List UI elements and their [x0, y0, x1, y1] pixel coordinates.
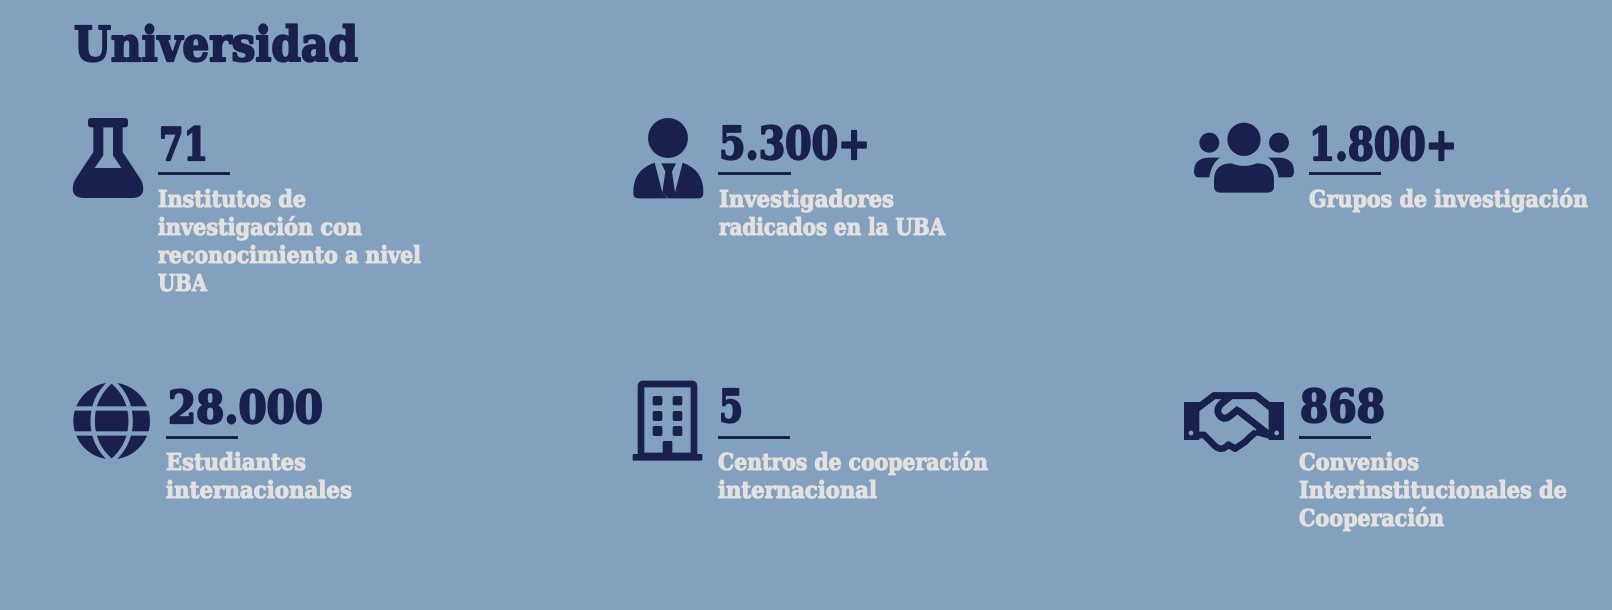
description: convenios: [1299, 449, 1567, 532]
description: convenios: Interinstitucionales de: [1299, 477, 1567, 504]
description: grupos: Grupos de investigación: [1309, 186, 1588, 213]
panel: convenios: [1184, 380, 1567, 532]
description: institutos: [158, 186, 421, 297]
panel: grupos: [1194, 118, 1588, 213]
icon: building: [633, 384, 702, 461]
panel: estudiantes: [70, 381, 352, 504]
description: convenios: Cooperación: [1299, 505, 1444, 532]
description: centros: [718, 449, 988, 504]
panel: investigadores: [633, 117, 946, 241]
number: 28.000: 28.000: [168, 381, 323, 434]
panel: institutos: [73, 118, 421, 297]
icon: person with tie: [633, 118, 703, 198]
description: investigadores: [719, 186, 946, 241]
number: 5: 5: [719, 380, 743, 433]
underline: [1299, 436, 1371, 439]
description: estudiantes: [166, 449, 352, 504]
description: convenios: Convenios: [1299, 449, 1419, 476]
description: investigadores: Investigadores: [719, 186, 894, 213]
underline: [166, 436, 238, 439]
underline: [718, 172, 791, 175]
description: institutos: reconocimiento a nivel: [158, 242, 421, 269]
description: institutos: investigación con: [158, 214, 362, 241]
description: estudiantes: internacionales: [166, 477, 352, 504]
title: Universidad: [74, 17, 358, 73]
description: investigadores: radicados en la UBA: [719, 214, 946, 241]
number: 5.300+: 5.300+: [719, 117, 870, 170]
description: institutos: Institutos de: [158, 186, 306, 213]
description: centros: Centros de cooperación: [718, 449, 988, 476]
underline: [718, 436, 790, 439]
icon: globe: [70, 381, 153, 461]
icon: group of people: [1194, 123, 1294, 193]
number: 868: 868: [1300, 380, 1385, 433]
underline: [158, 172, 230, 175]
underline: [1309, 172, 1381, 175]
number: 1.800+: 1.800+: [1309, 118, 1457, 171]
icon: handshake: [1184, 396, 1284, 449]
description: institutos: UBA: [158, 270, 208, 297]
icon: flask: [73, 118, 143, 198]
number: 71: 71: [159, 118, 208, 171]
panel: centros: [633, 380, 988, 504]
description: centros: internacional: [718, 477, 877, 504]
description: estudiantes: Estudiantes: [166, 449, 306, 476]
